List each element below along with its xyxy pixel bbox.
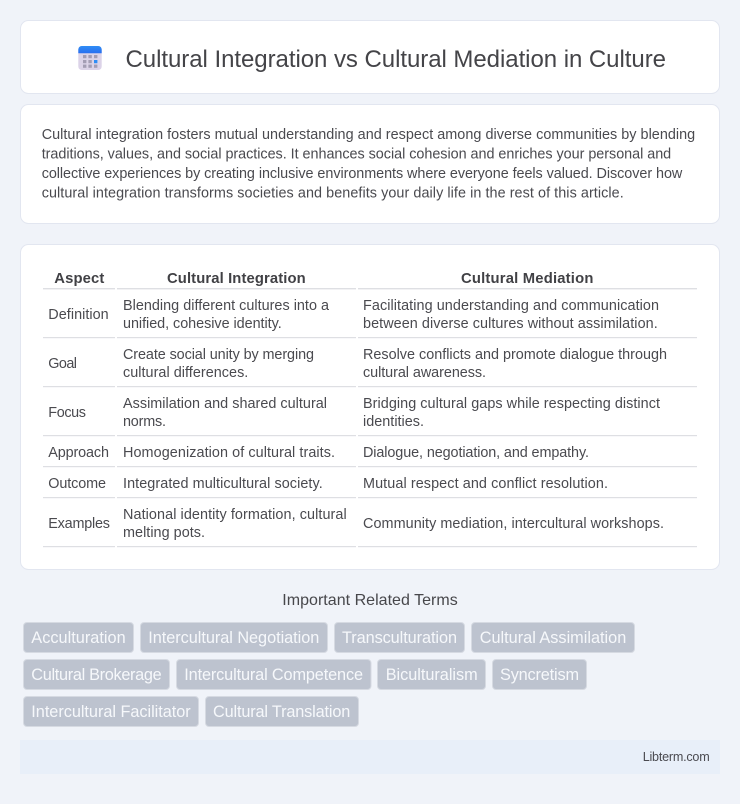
row: focus [48, 396, 660, 430]
row: outcome [48, 476, 608, 492]
row: definition: Blending different cultures into a [123, 298, 329, 314]
row: approach: Approach [48, 445, 109, 461]
tag: Biculturalism [378, 660, 486, 690]
row: examples: Community mediation, intercultural workshops. [363, 516, 664, 532]
row: outcome: Integrated multicultural society. [123, 476, 323, 492]
tag: Cultural Brokerage: Cultural Brokerage [31, 666, 162, 684]
tag: Acculturation [24, 622, 134, 652]
row: examples: melting pots. [123, 525, 205, 541]
row: approach [48, 445, 589, 461]
row: focus: Bridging cultural gaps while respecting distinct [363, 396, 660, 412]
tag: Cultural Translation [206, 696, 358, 726]
panel: header [20, 20, 720, 94]
row: definition: between diverse cultures without assimilation. [363, 316, 658, 332]
intro paragraph: cultural integration transforms societies and benefits your daily life in the rest of this article. [42, 186, 624, 202]
row: examples [48, 507, 664, 541]
tag: Biculturalism: Biculturalism [386, 666, 478, 684]
tag: Intercultural Competence [176, 660, 371, 690]
row: approach: Dialogue, negotiation, and empathy. [363, 445, 589, 461]
tag: Cultural Translation: Cultural Translation [213, 703, 350, 721]
row: approach: Homogenization of cultural traits. [123, 445, 335, 461]
heading: important related terms: Important Related Terms [282, 592, 458, 609]
row: focus: Focus [48, 405, 86, 421]
panel: introduction [20, 104, 720, 224]
title: Cultural Integration vs Cultural Mediation in Culture [126, 46, 666, 73]
row: focus: Assimilation and shared cultural [123, 396, 327, 412]
intro paragraph [42, 127, 695, 202]
footer [20, 740, 720, 774]
row: goal: Resolve conflicts and promote dialogue through [363, 347, 667, 363]
row: definition: Facilitating understanding and communication [363, 298, 659, 314]
table header row: Aspect [54, 271, 104, 287]
tag: Syncretism [492, 660, 586, 690]
row: definition: Definition [48, 307, 109, 323]
row: examples: National identity formation, cultural [123, 507, 347, 523]
tag: Syncretism: Syncretism [500, 666, 579, 684]
related terms tags [24, 622, 634, 726]
tag: Cultural Brokerage [24, 660, 170, 690]
row: outcome: Mutual respect and conflict resolution. [363, 476, 608, 492]
row: definition [48, 298, 659, 332]
row: focus: identities. [363, 414, 424, 430]
row: focus: norms. [123, 414, 166, 430]
row: goal: cultural differences. [123, 365, 248, 381]
tag: Transculturation [334, 622, 464, 652]
tag: Intercultural Negotiation: Intercultural Negotiation [148, 629, 319, 647]
tag: Intercultural Negotiation [140, 622, 328, 652]
row: outcome: Outcome [48, 476, 106, 492]
row: goal [48, 347, 667, 381]
row: examples: Examples [48, 516, 110, 532]
tag: Intercultural Facilitator: Intercultural Facilitator [31, 703, 191, 721]
intro paragraph: collective experiences by creating inclusive environments where everyone feels valued. Discover how [42, 166, 683, 182]
row: goal: Goal [48, 356, 77, 372]
intro paragraph: traditions, values, and social practices. It enhances social cohesion and enriches your personal and [42, 146, 671, 162]
tag: Acculturation: Acculturation [31, 629, 126, 647]
intro paragraph: Cultural integration fosters mutual understanding and respect among diverse communities by blending [42, 127, 695, 143]
table header row [54, 271, 593, 287]
tag: Cultural Assimilation: Cultural Assimilation [480, 629, 626, 647]
panel: comparison table [20, 244, 720, 570]
tag: Intercultural Facilitator [24, 696, 198, 726]
tag: Transculturation: Transculturation [342, 629, 457, 647]
row: goal: Create social unity by merging [123, 347, 314, 363]
row: goal: cultural awareness. [363, 365, 486, 381]
table header row: Cultural Mediation [461, 271, 593, 287]
footer credit: Libterm.com [643, 750, 710, 764]
icon: calendar [78, 46, 102, 70]
tag: Intercultural Competence: Intercultural Competence [184, 666, 363, 684]
row: definition: unified, cohesive identity. [123, 316, 282, 332]
table header row: Cultural Integration [167, 271, 306, 287]
tag: Cultural Assimilation [472, 622, 634, 652]
